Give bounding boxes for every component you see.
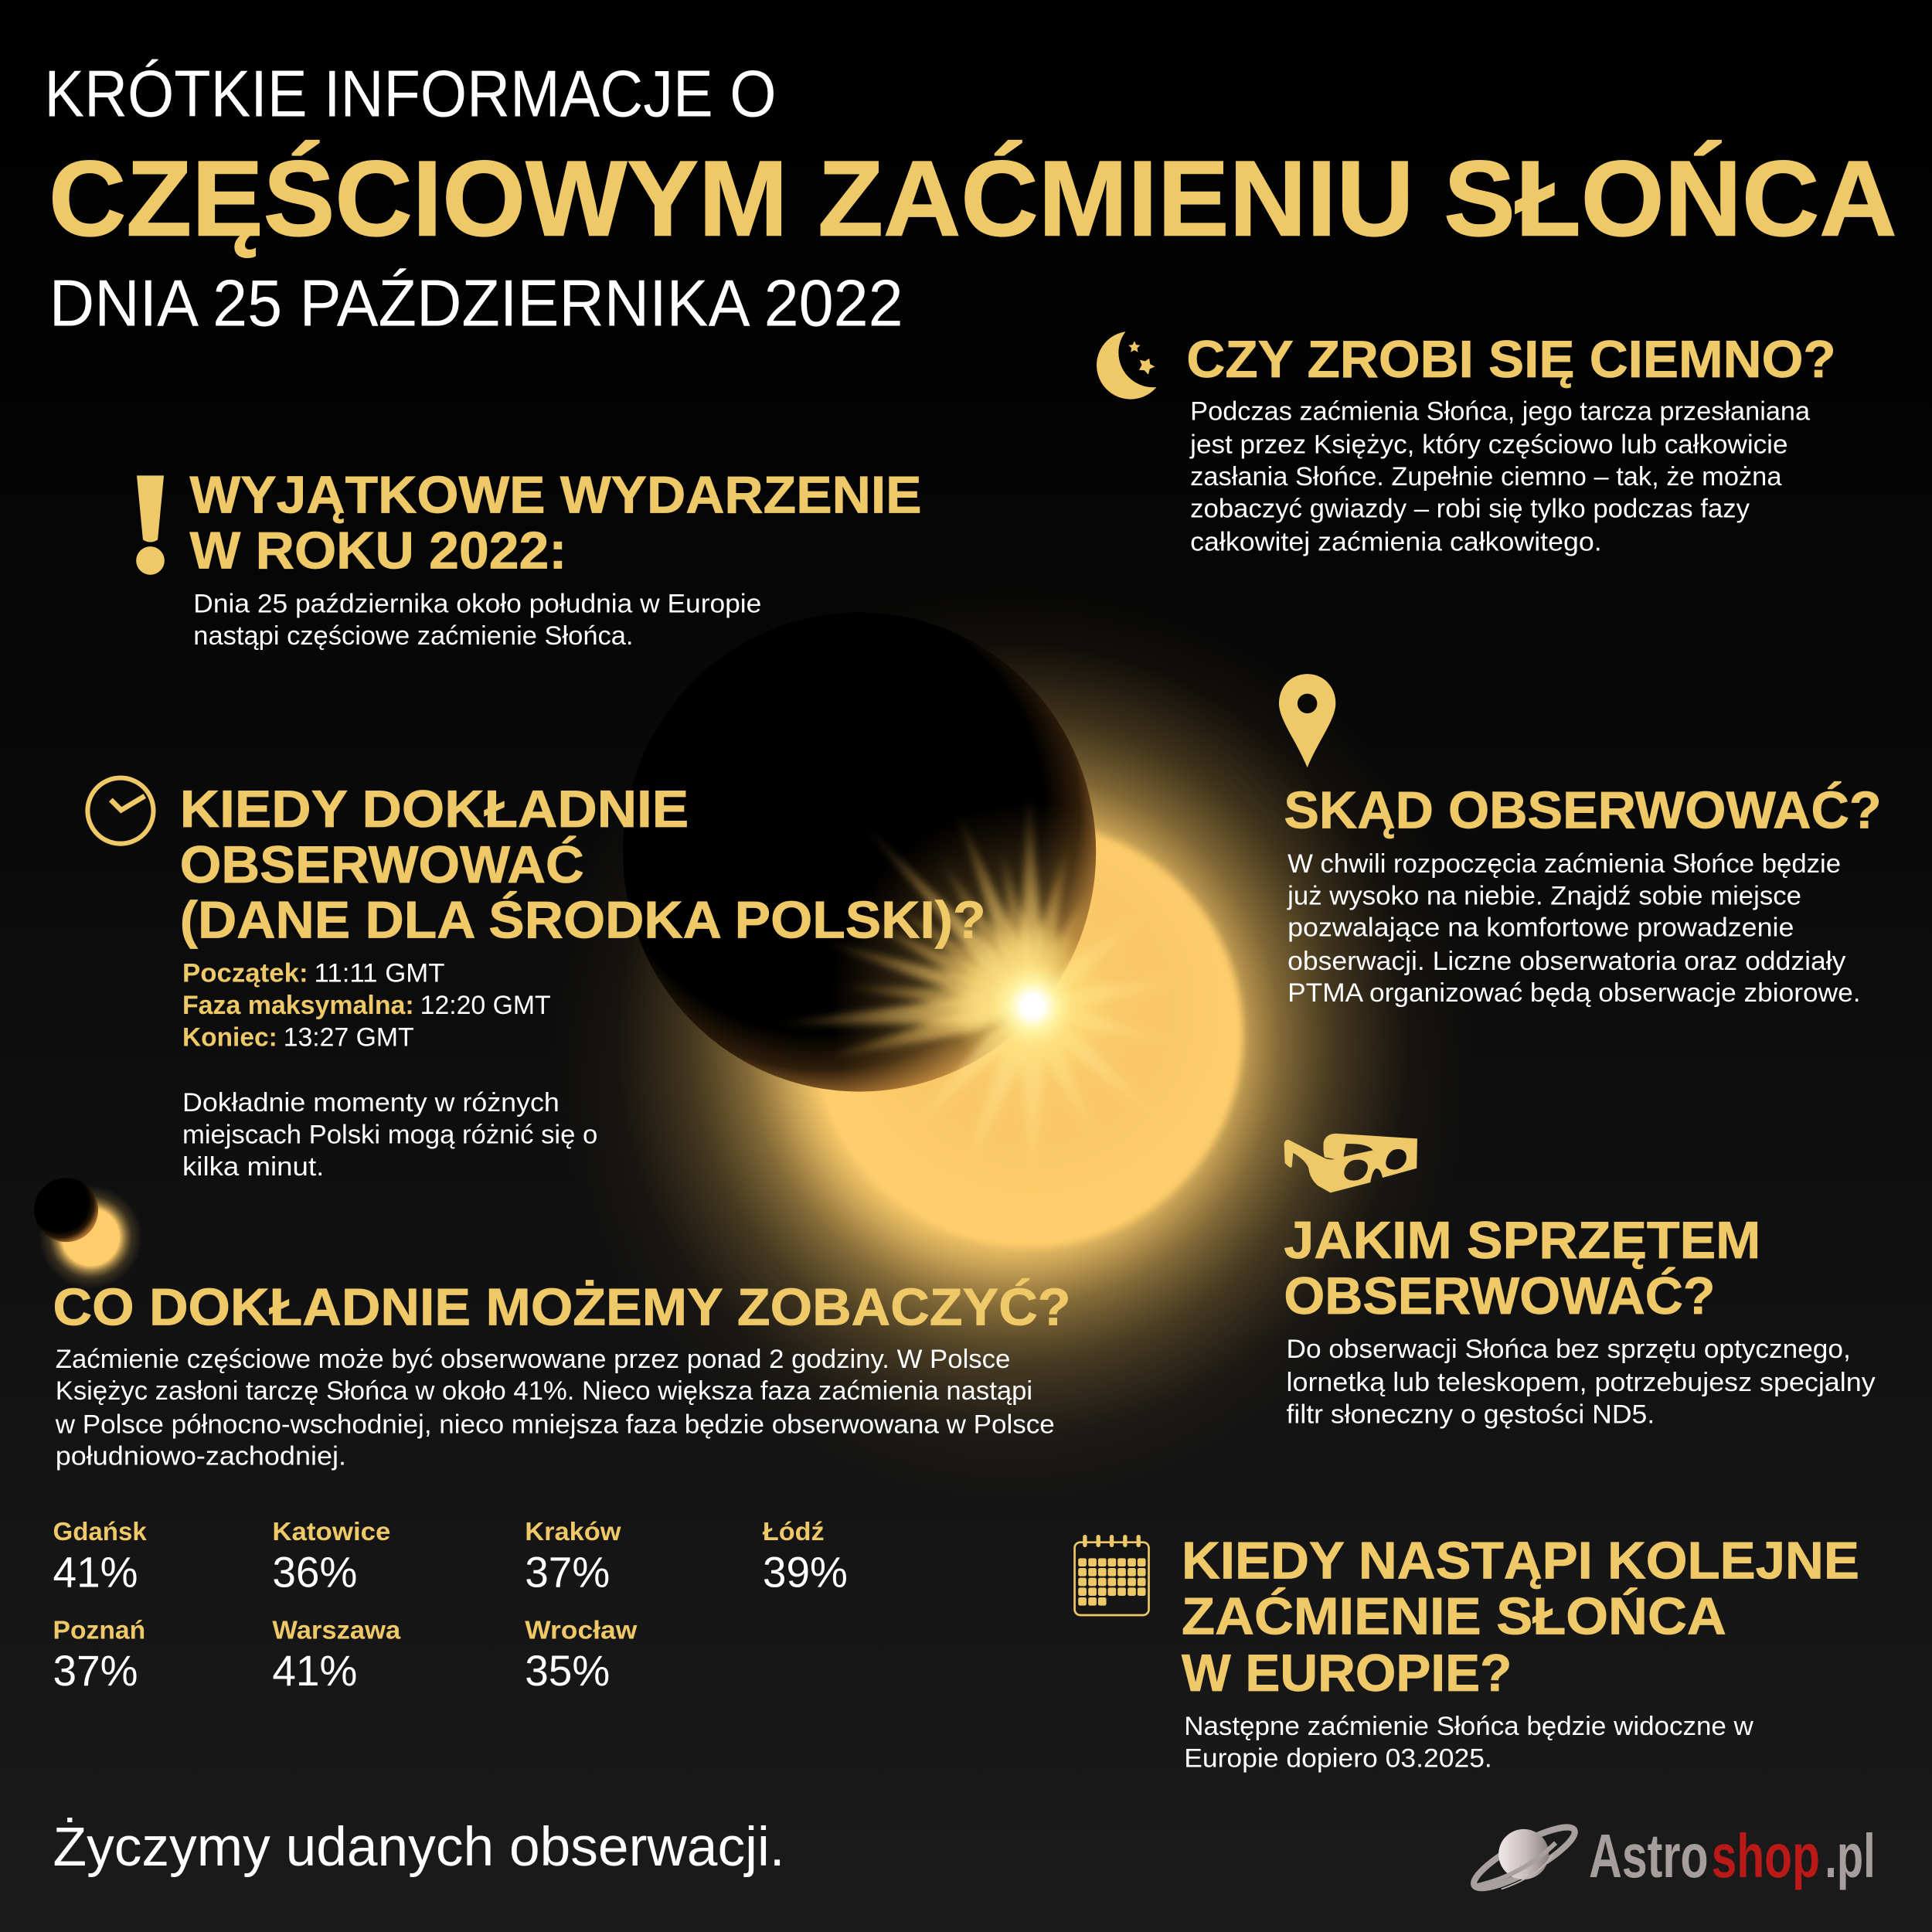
heading: KIEDY DOKŁADNIE — [180, 781, 689, 838]
flare fan glow — [829, 803, 1236, 1209]
body text: jest przez Księżyc, który częściowo lub całkowicie — [1189, 430, 1787, 460]
times: Koniec: — [182, 1023, 277, 1053]
moon disc — [623, 612, 1096, 1092]
Kraków: Kraków — [525, 1518, 622, 1546]
panel: jakim sprzętem obserwować — [1284, 1134, 1876, 1430]
icon: small partial eclipse — [34, 1178, 142, 1289]
Łódź: Łódź — [763, 1518, 825, 1546]
Kraków — [525, 1518, 622, 1597]
icon: ringed planet — [1468, 1818, 1581, 1898]
body text: Podczas zaćmienia Słońca, jego tarcza przesłaniana — [1190, 397, 1811, 427]
body text — [182, 1088, 597, 1182]
body text — [55, 1345, 1055, 1471]
Gdańsk — [53, 1518, 147, 1597]
body text: PTMA organizować będą obserwacje zbiorowe. — [1287, 978, 1861, 1008]
body text — [1189, 397, 1811, 557]
body text: Dnia 25 października około południa w Europie — [193, 589, 761, 618]
body text: Do obserwacji Słońca bez sprzętu optycznego, — [1287, 1335, 1851, 1364]
heading: SKĄD OBSERWOWAĆ? — [1284, 781, 1882, 840]
body text — [1287, 1335, 1876, 1430]
Warszawa — [272, 1617, 401, 1695]
heading — [180, 781, 986, 950]
heading: W EUROPIE? — [1182, 1645, 1512, 1702]
Gdańsk: 41% — [53, 1548, 138, 1597]
body text: w Polsce północno-wschodniej, nieco mniejsza faza będzie obserwowana w Polsce — [55, 1410, 1055, 1439]
heading: ZAĆMIENIE SŁOŃCA — [1182, 1587, 1726, 1645]
body text: już wysoko na niebie. Znajdź sobie miejsce — [1287, 881, 1801, 910]
icon: exclamation mark — [136, 475, 165, 575]
sun glow — [551, 578, 1475, 1502]
times: 11:11 GMT — [315, 959, 445, 988]
times: 13:27 GMT — [284, 1023, 414, 1053]
Poznań: Poznań — [53, 1617, 145, 1645]
panel: co dokładnie możemy zobaczyć — [34, 1178, 1071, 1695]
wordmark: shop — [1712, 1821, 1820, 1890]
body text: Następne zaćmienie Słońca będzie widoczne w — [1184, 1712, 1753, 1741]
light rays — [767, 784, 1192, 1205]
Łódź: 39% — [763, 1548, 848, 1597]
times — [182, 959, 551, 1053]
heading: KIEDY NASTĄPI KOLEJNE — [1182, 1532, 1859, 1590]
heading: JAKIM SPRZĘTEM — [1284, 1212, 1760, 1270]
logo: Astroshop.pl — [1468, 1818, 1876, 1898]
heading: OBSERWOWAĆ — [180, 835, 584, 894]
wordmark — [1589, 1821, 1876, 1890]
wordmark: Astro — [1589, 1821, 1709, 1890]
Wrocław: Wrocław — [525, 1617, 638, 1645]
panel: skąd obserwować — [1279, 674, 1882, 1008]
closing message: Życzymy udanych obserwacji. — [53, 1816, 785, 1878]
title line 2: CZĘŚCIOWYM ZAĆMIENIU SŁOŃCA — [49, 139, 1897, 259]
body text: kilka minut. — [182, 1152, 324, 1182]
Warszawa: Warszawa — [272, 1617, 401, 1645]
times: Faza maksymalna: — [182, 991, 414, 1020]
body text: pozwalające na komfortowe prowadzenie — [1287, 913, 1794, 943]
panel: kiedy dokładnie obserwować — [87, 778, 986, 1182]
sun disc — [819, 823, 1243, 1247]
Katowice — [272, 1518, 390, 1597]
body text: Dokładnie momenty w różnych — [182, 1088, 560, 1117]
heading: CO DOKŁADNIE MOŻEMY ZOBACZYĆ? — [53, 1277, 1071, 1336]
body text — [1184, 1712, 1753, 1773]
city percentages — [53, 1518, 848, 1695]
Poznań — [53, 1617, 145, 1695]
title line 3: DNIA 25 PAŹDZIERNIKA 2022 — [49, 267, 903, 341]
heading: CZY ZROBI SIĘ CIEMNO? — [1186, 331, 1836, 389]
body text: miejscach Polski mogą różnić się o — [182, 1121, 597, 1150]
body text — [193, 589, 761, 651]
body text: filtr słoneczny o gęstości ND5. — [1287, 1400, 1655, 1430]
icon: eclipse glasses — [1284, 1134, 1417, 1192]
times: 12:20 GMT — [420, 991, 551, 1020]
heading: OBSERWOWAĆ? — [1284, 1267, 1715, 1325]
Poznań: 37% — [53, 1646, 138, 1695]
icon: location pin — [1279, 674, 1335, 767]
heading — [190, 467, 922, 580]
icon: crescent moon and stars — [1097, 332, 1157, 400]
body text: zasłania Słońce. Zupełnie ciemno – tak, że można — [1190, 462, 1782, 492]
heading — [1284, 1212, 1760, 1325]
body text: W chwili rozpoczęcia zaćmienia Słońce będzie — [1287, 849, 1841, 879]
Wrocław: 35% — [525, 1646, 610, 1695]
icon: calendar — [1075, 1535, 1149, 1615]
Łódź — [763, 1518, 848, 1597]
title — [44, 58, 1897, 341]
Kraków: 37% — [525, 1548, 610, 1597]
panel: czy zrobi się ciemno — [1097, 331, 1836, 557]
body text: całkowitej zaćmienia całkowitego. — [1190, 528, 1602, 557]
Wrocław — [525, 1617, 638, 1695]
heading: WYJĄTKOWE WYDARZENIE — [190, 467, 922, 525]
Katowice: 36% — [272, 1548, 357, 1597]
body text: nastąpi częściowe zaćmienie Słońca. — [193, 621, 634, 651]
heading: W ROKU 2022: — [190, 522, 566, 580]
body text: Księżyc zasłoni tarczę Słońca w około 41%. Nieco większa faza zaćmienia nastąpi — [56, 1376, 1032, 1406]
Katowice: Katowice — [272, 1518, 390, 1546]
body text — [1287, 849, 1861, 1008]
heading: (DANE DLA ŚRODKA POLSKI)? — [180, 891, 986, 950]
body text: Zaćmienie częściowe może być obserwowane przez ponad 2 godziny. W Polsce — [56, 1345, 1010, 1374]
Warszawa: 41% — [272, 1646, 357, 1695]
body text: południowo-zachodniej. — [56, 1442, 346, 1471]
panel: wyjątkowe wydarzenie — [136, 467, 922, 651]
flare core — [951, 925, 1114, 1087]
body text: obserwacji. Liczne obserwatoria oraz oddziały — [1287, 947, 1846, 976]
panel: kiedy nastąpi kolejne zaćmienie — [1075, 1532, 1859, 1773]
body text: Europie dopiero 03.2025. — [1184, 1743, 1492, 1773]
body text: lornetką lub teleskopem, potrzebujesz specjalny — [1287, 1368, 1876, 1397]
icon: clock — [87, 778, 154, 844]
times: Początek: — [182, 959, 308, 988]
main eclipse illustration — [551, 578, 1475, 1502]
heading — [1182, 1532, 1859, 1702]
title line 1: KRÓTKIE INFORMACJE O — [44, 58, 776, 131]
body text: zobaczyć gwiazdy – robi się tylko podczas fazy — [1190, 495, 1750, 524]
wordmark: .pl — [1825, 1821, 1876, 1890]
Gdańsk: Gdańsk — [53, 1518, 147, 1546]
